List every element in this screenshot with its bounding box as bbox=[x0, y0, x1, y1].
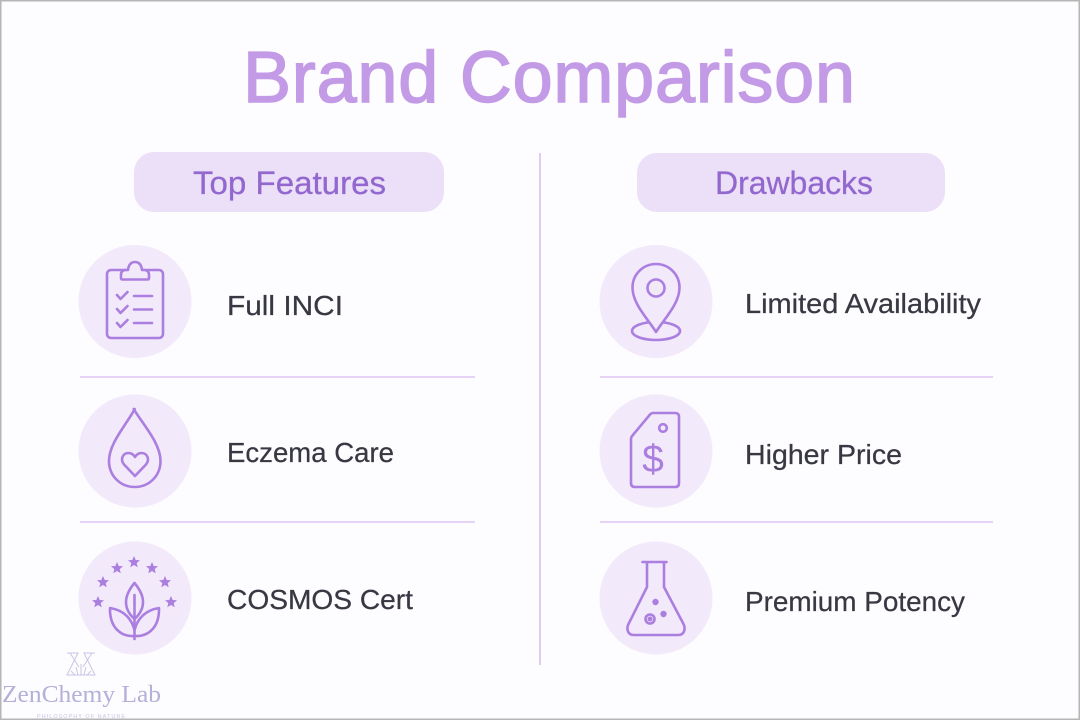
panel: top features bbox=[78, 152, 475, 654]
panel: drawbacks bbox=[600, 153, 993, 654]
label: Eczema Care bbox=[227, 437, 394, 468]
icon: flask bbox=[627, 562, 685, 635]
heading: drawbacks bbox=[637, 153, 945, 212]
row: eczema care bbox=[78, 394, 394, 508]
label: Premium Potency bbox=[745, 586, 965, 617]
heading: top features: Top Features bbox=[193, 165, 386, 201]
row: premium potency bbox=[600, 542, 965, 654]
heading: drawbacks: Drawbacks bbox=[715, 165, 873, 201]
logo mark bbox=[67, 653, 95, 675]
row: cosmos cert bbox=[78, 542, 413, 654]
logo: zenchemy lab bbox=[2, 653, 161, 720]
label: Full INCI bbox=[227, 290, 343, 321]
dollar sign: $ bbox=[642, 438, 664, 481]
row: limited availability bbox=[600, 245, 981, 358]
tagline: PHILOSOPHY OF NATURE bbox=[37, 714, 125, 720]
icon: clipboard bbox=[107, 262, 163, 338]
row: full inci bbox=[78, 245, 343, 358]
icon: location pin bbox=[632, 264, 680, 340]
label: COSMOS Cert bbox=[227, 584, 413, 615]
heading: top features bbox=[134, 152, 444, 212]
row: higher price bbox=[600, 394, 902, 508]
plant bbox=[110, 583, 159, 639]
label: Higher Price bbox=[745, 439, 902, 470]
title: Brand Comparison bbox=[243, 38, 855, 118]
icon: price tag bbox=[631, 413, 679, 487]
label: Limited Availability bbox=[745, 288, 981, 319]
wordmark: ZenChemy Lab bbox=[2, 682, 161, 708]
icon: drop with heart bbox=[109, 409, 160, 487]
stars bbox=[92, 556, 177, 607]
icon: stars and plant bbox=[92, 556, 177, 639]
bubbles bbox=[648, 599, 667, 622]
